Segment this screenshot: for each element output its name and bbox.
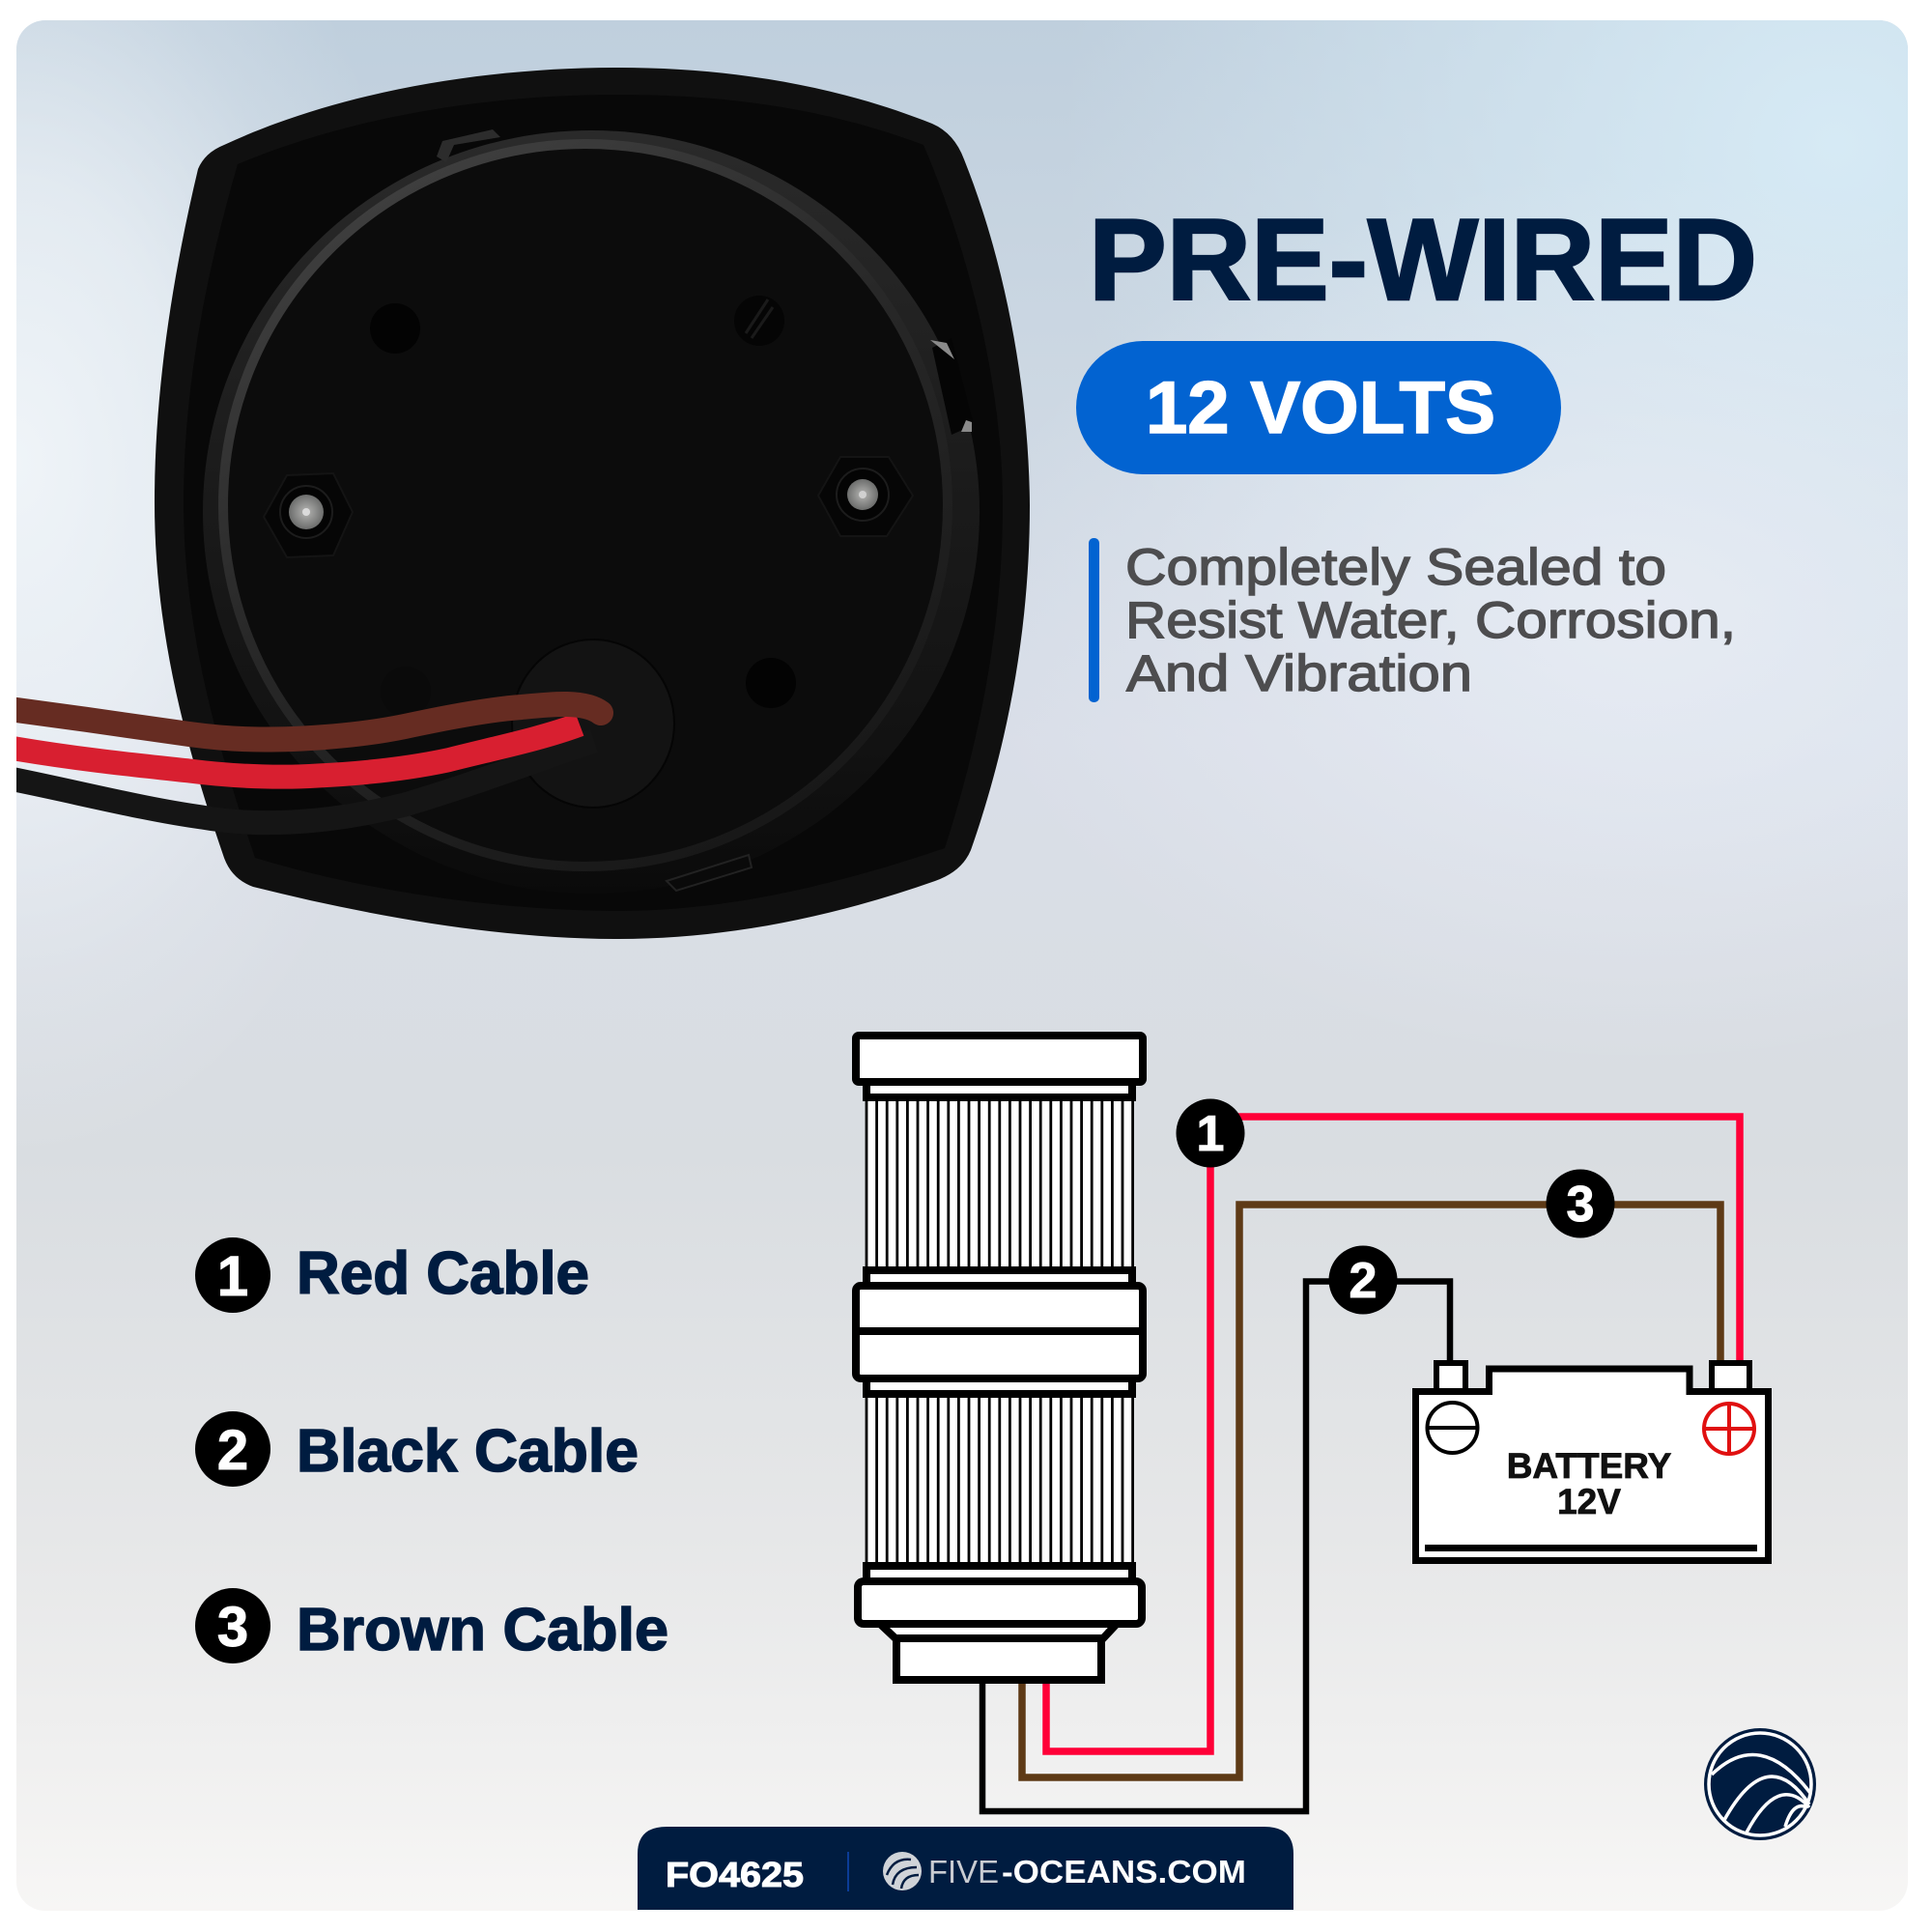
footer divider bbox=[847, 1852, 849, 1891]
base block bbox=[896, 1638, 1101, 1680]
legend: cable list bbox=[195, 1237, 668, 1663]
legend item 3 bbox=[195, 1588, 668, 1663]
lantern line drawing bbox=[856, 1036, 1143, 1680]
legend item 1 bbox=[195, 1237, 589, 1313]
badge 2: 2 bbox=[1350, 1253, 1377, 1309]
top cap bbox=[856, 1036, 1143, 1082]
base cone bbox=[880, 1624, 1117, 1639]
legend item 1: Red Cable bbox=[297, 1240, 589, 1307]
footer bar bbox=[638, 1827, 1293, 1910]
diagram number badges bbox=[1177, 1099, 1615, 1314]
grommet bbox=[512, 639, 674, 808]
legend item 2: 2 bbox=[217, 1419, 248, 1482]
red wire bbox=[10, 724, 580, 777]
middle band bbox=[856, 1286, 1143, 1378]
brand logo bbox=[1704, 1728, 1816, 1840]
bottom cap bbox=[858, 1581, 1142, 1624]
title: PRE-WIRED bbox=[1089, 195, 1757, 325]
legend item 2 bbox=[195, 1411, 639, 1487]
voltage pill bbox=[1076, 341, 1561, 474]
black wire bbox=[16, 755, 530, 835]
battery body bbox=[1416, 1369, 1768, 1561]
legend item 3: 3 bbox=[217, 1596, 248, 1659]
badge 3 bbox=[1546, 1169, 1615, 1238]
badge 2 bbox=[1329, 1246, 1397, 1314]
minus symbol bbox=[1428, 1403, 1478, 1453]
website: FIVE bbox=[928, 1854, 999, 1889]
legend item 3: Brown Cable bbox=[297, 1597, 668, 1663]
upper ribbed section bbox=[867, 1099, 1133, 1269]
screw right bbox=[836, 468, 890, 522]
battery label bbox=[1507, 1446, 1672, 1521]
plus symbol bbox=[1704, 1404, 1754, 1454]
rear disc bbox=[223, 144, 948, 867]
battery label: BATTERY bbox=[1507, 1446, 1672, 1486]
legend item 1: 1 bbox=[217, 1245, 248, 1308]
description text block: Completely Sealed to bbox=[1125, 539, 1666, 596]
product photo: light housing rear view with wires bbox=[10, 68, 1030, 939]
legend item 2: Black Cable bbox=[297, 1418, 639, 1485]
battery bbox=[1416, 1363, 1768, 1561]
badge 1 bbox=[1177, 1099, 1244, 1167]
screw left bbox=[279, 485, 333, 539]
product code: FO4625 bbox=[666, 1855, 804, 1894]
housing outer shell bbox=[155, 68, 1030, 939]
badge 3: 3 bbox=[1567, 1177, 1594, 1233]
housing inner recess bbox=[184, 95, 1003, 911]
battery base line bbox=[1425, 1545, 1757, 1551]
battery label: 12V bbox=[1557, 1482, 1621, 1521]
description text block: And Vibration bbox=[1126, 645, 1472, 702]
description text block: Resist Water, Corrosion, bbox=[1125, 592, 1736, 649]
brown wire bbox=[10, 704, 601, 739]
voltage pill: 12 VOLTS bbox=[1146, 367, 1495, 449]
rear body bbox=[203, 130, 980, 782]
clip notches bbox=[437, 129, 500, 162]
battery terminals bbox=[1436, 1363, 1465, 1391]
footer bar: -OCEANS.COM bbox=[1002, 1854, 1246, 1889]
lower ribbed section bbox=[867, 1396, 1133, 1564]
wiring diagram: cables bbox=[982, 1117, 1740, 1811]
brown cable bbox=[1022, 1205, 1720, 1777]
small logo icon bbox=[883, 1852, 922, 1890]
holes bbox=[370, 303, 420, 354]
collars bbox=[867, 1080, 1132, 1584]
description text block bbox=[1089, 538, 1736, 702]
red cable bbox=[1046, 1117, 1740, 1751]
badge 1: 1 bbox=[1197, 1106, 1224, 1162]
black cable bbox=[982, 1281, 1450, 1811]
